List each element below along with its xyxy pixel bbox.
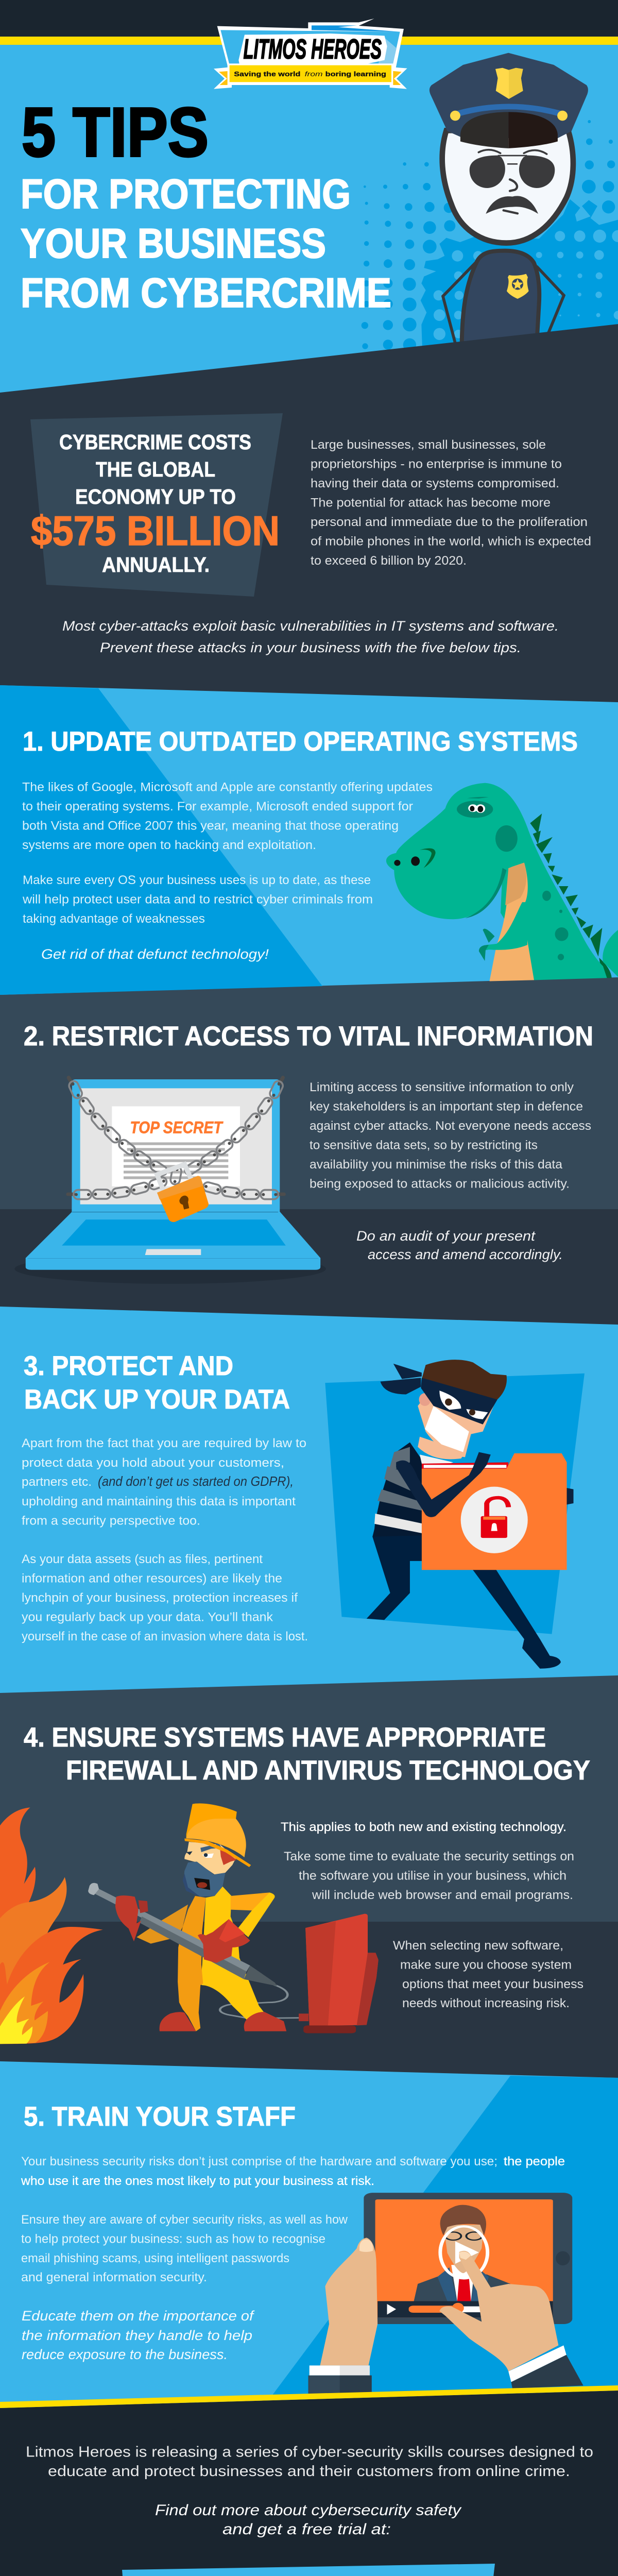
illustration: thief with folder xyxy=(325,1360,585,1669)
illustration: police officer xyxy=(430,53,588,349)
body text: This applies to both new and existing technology. xyxy=(281,1820,566,1834)
halftone dot pattern xyxy=(362,120,618,351)
intro paragraph: Large businesses, small businesses, sole xyxy=(311,438,546,452)
body text: lynchpin of your business, protection increases if xyxy=(22,1591,298,1605)
body text: will include web browser and email programs. xyxy=(312,1888,573,1902)
callout: global cost of cybercrime: CYBERCRIME COSTS xyxy=(59,430,251,454)
body text: (and don’t get us started on GDPR), xyxy=(98,1473,294,1489)
panel: tip 1 xyxy=(0,685,618,995)
body text: Make sure every OS your business uses is up to date, as these xyxy=(23,873,371,887)
body text: from a security perspective too. xyxy=(22,1514,200,1528)
illustration: video tablet and hands xyxy=(308,2193,583,2394)
body text: Apart from the fact that you are required by law to xyxy=(22,1436,306,1450)
body text: make sure you choose system xyxy=(400,1958,572,1972)
intro paragraph: proprietorships - no enterprise is immune to xyxy=(311,457,562,471)
panel: footer xyxy=(26,2444,593,2576)
heading: BACK UP YOUR DATA xyxy=(24,1384,290,1415)
body text: Your business security risks don’t just comprise of the hardware and software you use; xyxy=(21,2155,497,2168)
laptop base xyxy=(14,1212,326,1284)
callout: global cost of cybercrime: ECONOMY UP TO xyxy=(75,485,236,509)
intro tagline: Prevent these attacks in your business with the five below tips. xyxy=(100,640,521,655)
logo tagline xyxy=(234,70,386,78)
body text xyxy=(22,1436,308,1643)
body text: and general information security. xyxy=(21,2270,207,2284)
intro paragraph: of mobile phones in the world, which is expected xyxy=(311,535,591,548)
body text: to help protect your business: such as how to recognise xyxy=(21,2232,325,2246)
callout text: Get rid of that defunct technology! xyxy=(41,946,269,962)
body text: availability you minimise the risks of this data xyxy=(310,1158,563,1172)
body text: to sensitive data sets, so by restricting its xyxy=(310,1139,538,1152)
callout text xyxy=(356,1228,563,1262)
panel: tip 3 xyxy=(0,1307,618,1693)
heading xyxy=(24,1722,590,1786)
body text xyxy=(21,2155,565,2284)
yellow divider band xyxy=(0,2385,618,2408)
footer tagline: Find out more about cybersecurity safety xyxy=(155,2502,462,2519)
panel: tip 4 xyxy=(0,1722,590,2044)
body text: to their operating systems. For example, Microsoft ended support for xyxy=(22,800,413,814)
panel: section 4 background xyxy=(0,1669,618,2087)
footer tagline: and get a free trial at: xyxy=(222,2521,391,2538)
body text: you regularly back up your data. You’ll thank xyxy=(22,1611,273,1624)
body text: being exposed to attacks or malicious activity. xyxy=(310,1177,570,1191)
officer hat xyxy=(430,53,588,148)
panel: hero background xyxy=(0,0,618,412)
intro paragraph: personal and immediate due to the proliferation xyxy=(311,515,588,529)
callout: global cost of cybercrime: $575 BILLION xyxy=(31,508,280,554)
intro tagline xyxy=(62,618,559,655)
panel: intro dark section xyxy=(0,324,618,1030)
padlock xyxy=(157,1164,209,1222)
callout text xyxy=(22,2308,255,2362)
body text: information and other resources) are likely the xyxy=(22,1571,282,1586)
callout: global cost of cybercrime: THE GLOBAL xyxy=(96,457,215,481)
intro paragraph: to exceed 6 billion by 2020. xyxy=(311,554,467,568)
intro tagline: Most cyber-attacks exploit basic vulnerabilities in IT systems and software. xyxy=(62,618,559,634)
body text: yourself in the case of an invasion where data is lost. xyxy=(22,1630,308,1643)
body text: options that meet your business xyxy=(402,1977,583,1991)
body text: needs without increasing risk. xyxy=(402,1996,570,2010)
body text: the people xyxy=(504,2155,565,2168)
officer head xyxy=(442,130,573,243)
body text: upholding and maintaining this data is important xyxy=(22,1495,296,1509)
body text: protect data you hold about your customers, xyxy=(22,1456,284,1470)
title: FOR PROTECTING xyxy=(21,171,351,217)
panel: tip 5 xyxy=(0,2061,618,2408)
body text: systems are more open to hacking and exploitation. xyxy=(22,838,316,852)
callout: global cost of cybercrime: ANNUALLY. xyxy=(102,553,210,577)
panel: section 2 background xyxy=(0,969,618,1343)
heading: 5. TRAIN YOUR STAFF xyxy=(24,2102,296,2132)
body text: The likes of Google, Microsoft and Apple are constantly offering updates xyxy=(22,780,433,794)
laptop screen and chains: TOP SECRET xyxy=(130,1118,224,1137)
body text: both Vista and Office 2007 this year, meaning that those operating xyxy=(22,819,399,833)
body text: taking advantage of weaknesses xyxy=(23,912,205,926)
footer statement: Litmos Heroes is releasing a series of cyber-security skills courses designed to xyxy=(26,2444,593,2461)
panel: tip 2 xyxy=(14,1021,593,1284)
title: FROM CYBERCRIME xyxy=(21,270,391,316)
body text: will help protect user data and to restrict cyber criminals from xyxy=(22,892,373,907)
illustration: chained laptop xyxy=(14,1078,326,1284)
panel: footer background xyxy=(0,2380,618,2576)
callout: global cost of cybercrime xyxy=(30,413,283,597)
body text: the software you utilise in your business, which xyxy=(299,1869,566,1883)
body text: against cyber attacks. Not everyone needs access xyxy=(310,1119,591,1133)
illustration: firefighter xyxy=(88,1803,286,2031)
title xyxy=(21,93,391,316)
body text: Limiting access to sensitive information to only xyxy=(310,1080,574,1094)
body text: Ensure they are aware of cyber security risks, as well as how xyxy=(21,2213,348,2227)
officer body xyxy=(443,251,564,349)
callout text: the information they handle to help xyxy=(22,2328,252,2343)
heading: 3. PROTECT AND xyxy=(24,1351,233,1381)
title: YOUR BUSINESS xyxy=(21,221,326,267)
laptop screen and chains xyxy=(67,1078,284,1222)
body text: key stakeholders is an important step in defence xyxy=(310,1099,583,1114)
callout text: reduce exposure to the business. xyxy=(22,2347,228,2362)
footer tagline xyxy=(155,2502,462,2538)
body text: When selecting new software, xyxy=(393,1939,563,1953)
illustration: flames xyxy=(0,1807,103,2044)
callout text: Do an audit of your present xyxy=(356,1228,536,1244)
callout text: access and amend accordingly. xyxy=(368,1247,563,1262)
heading: 4. ENSURE SYSTEMS HAVE APPROPRIATE xyxy=(24,1722,546,1753)
illustration: dinosaur xyxy=(386,783,618,981)
logo tagline: from xyxy=(305,70,323,78)
logo tagline: Saving the world xyxy=(234,70,300,78)
body text: partners etc. xyxy=(22,1475,92,1489)
body text: Take some time to evaluate the security settings on xyxy=(284,1850,574,1863)
left hand xyxy=(308,2238,377,2394)
body text: As your data assets (such as files, pertinent xyxy=(22,1552,263,1566)
intro paragraph: having their data or systems compromised. xyxy=(311,477,559,490)
right hand xyxy=(439,2251,583,2388)
footer statement: educate and protect businesses and their customers from online crime. xyxy=(48,2463,570,2480)
logo: Litmos Heroes xyxy=(214,19,407,89)
body text: who use it are the ones most likely to put your business at risk. xyxy=(21,2174,374,2188)
illustration: extinguisher xyxy=(220,1914,379,2033)
heading: 1. UPDATE OUTDATED OPERATING SYSTEMS xyxy=(23,726,578,757)
heading xyxy=(24,1351,290,1415)
logo wordmark: LITMOS HEROES xyxy=(244,34,382,64)
intro paragraph xyxy=(311,438,591,568)
intro paragraph: The potential for attack has become more xyxy=(311,496,551,510)
body text: email phishing scams, using intelligent passwords xyxy=(21,2251,289,2265)
callout text: Educate them on the importance of xyxy=(22,2308,255,2324)
body text xyxy=(22,780,433,926)
call to action button xyxy=(122,2564,495,2576)
logo tagline: boring learning xyxy=(325,70,386,78)
body text xyxy=(281,1820,583,2010)
footer statement xyxy=(26,2444,593,2480)
heading: FIREWALL AND ANTIVIRUS TECHNOLOGY xyxy=(66,1755,590,1786)
title: 5 TIPS xyxy=(22,93,209,171)
body text xyxy=(310,1080,591,1191)
